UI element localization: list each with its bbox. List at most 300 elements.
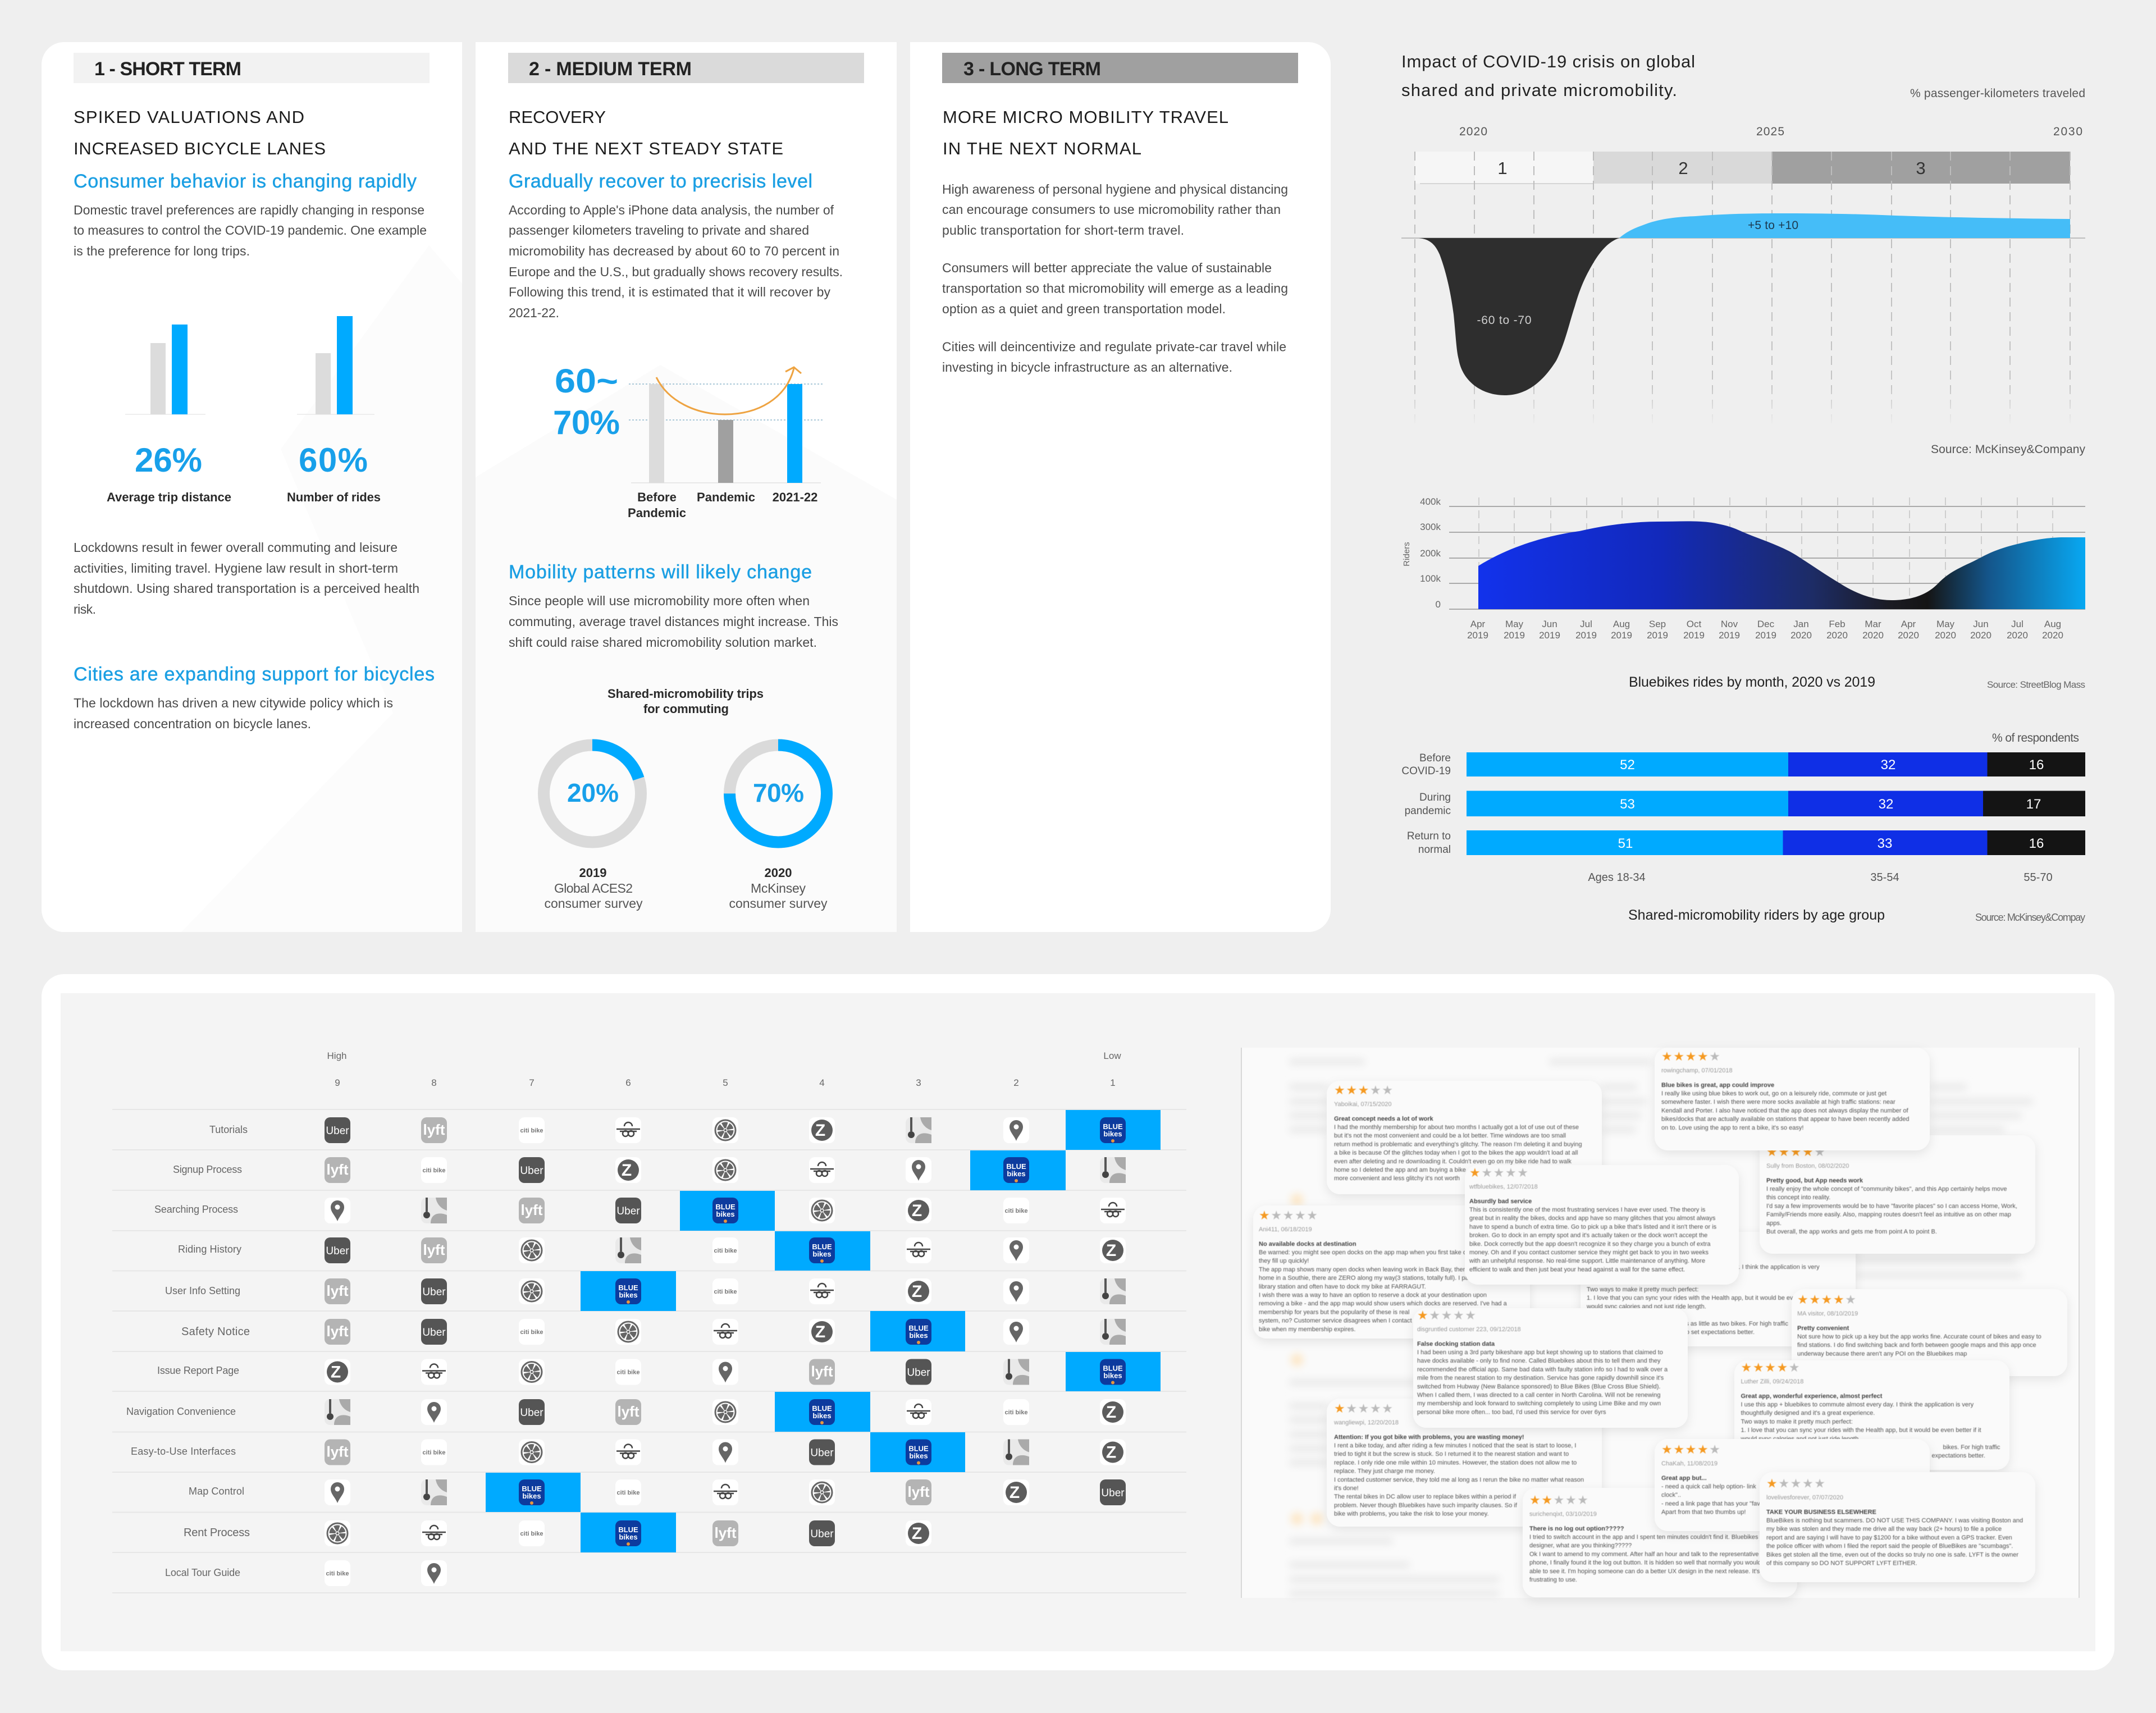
review card: lovelivesforever xyxy=(1760,1472,2035,1582)
icon: citi bike: citi bike xyxy=(617,1490,640,1496)
review card: disgruntled customer: my membership and look forward to switching completely to using Lime Bike and my own xyxy=(1417,1400,1661,1407)
review card: Ani411: ★★★★★ xyxy=(1259,1209,1319,1223)
bar: during pandemic: 53 xyxy=(1620,797,1635,812)
icon: citi bike: citi bike xyxy=(423,1167,445,1174)
row labels: pandemic xyxy=(1405,805,1451,817)
icon: map xyxy=(1100,1278,1126,1304)
month labels: Apr xyxy=(1901,619,1916,629)
review card: MA visitor: Pretty convenient xyxy=(1797,1325,1849,1332)
icon: blue bikes xyxy=(615,1278,641,1304)
text: apple data: Following this trend, it is estimated that it will recover by xyxy=(509,285,831,299)
review card: Ani411: removing a bike - and the app map would show users which docks are reserved. I've had a xyxy=(1259,1300,1508,1307)
month labels: 2020 xyxy=(1970,630,1991,641)
month labels: May xyxy=(1505,619,1524,629)
month labels: 2019 xyxy=(1504,630,1525,641)
review card: disgruntled customer: I had been using a 3rd party bikeshare app but kept showing up to stations that claimed to xyxy=(1417,1349,1663,1356)
icon: uber: Uber xyxy=(520,1165,543,1177)
scale header: Low xyxy=(1103,1050,1121,1061)
review card: rowingchamp: Kendall and Porter. I also have noticed that the app does not always display the number of xyxy=(1661,1107,1909,1114)
review card: Sully from Boston: this concept into reality. xyxy=(1766,1194,1830,1201)
text: lockdowns: Lockdowns result in fewer overall commuting and leisure xyxy=(74,540,398,555)
review card: Yaboikai: more convenient and less glitchy it's not worth xyxy=(1334,1175,1460,1182)
text: micromobility commuting: Since people will use micromobility more often when xyxy=(509,593,810,608)
stat: 60 percent: 60% xyxy=(299,441,368,479)
review card: MA visitor: find stations. I do find switching back and forth between google maps and this app once xyxy=(1797,1342,2036,1349)
heading: spiked valuations xyxy=(74,107,326,158)
header: long term xyxy=(942,53,1298,83)
icon: uber xyxy=(519,1157,545,1183)
icon: blue bikes xyxy=(906,1319,931,1345)
text: apple data: passenger kilometers traveling to private and shared xyxy=(509,223,809,237)
icon: citi bike: citi bike xyxy=(617,1369,640,1376)
chart labels: Before xyxy=(637,490,677,504)
row: Easy-to-Use Interfaces: Easy-to-Use Interfaces xyxy=(131,1446,236,1457)
chart: impact of covid-19 xyxy=(1401,52,2085,456)
phase bands: 2 xyxy=(1678,158,1688,178)
review card: disgruntled customer: ★★★★★ xyxy=(1417,1309,1477,1323)
icon: lyft xyxy=(906,1479,931,1505)
icon: pin xyxy=(1003,1117,1029,1143)
icon: citi bike: citi bike xyxy=(1005,1409,1027,1416)
chart: riders by age group xyxy=(1401,732,2085,923)
age group labels: 55-70 xyxy=(2023,871,2053,884)
stat: 60 to 70 percent: 70% xyxy=(553,404,620,441)
review card: Yaboikai: Great concept needs a lot of work xyxy=(1334,1116,1434,1122)
review card: lovelivesforever: my bike was stolen and they made me drive all the way back (2+ hours) to file a police xyxy=(1766,1526,2002,1533)
review card: wtfbluebikes: efficient to walk and then just beat your head against a wall for the same effect. xyxy=(1469,1266,1685,1273)
icon: uber: Uber xyxy=(810,1528,834,1540)
review card: Ani411: No available docks at destination xyxy=(1259,1241,1356,1248)
icon: citi bike xyxy=(1003,1198,1029,1223)
value: decline: -60 to -70 xyxy=(1477,314,1532,327)
heading: recovery: AND THE NEXT STEADY STATE xyxy=(509,139,783,158)
text: hygiene xyxy=(942,182,1288,237)
subheading: consumer behavior: Consumer behavior is changing rapidly xyxy=(74,171,417,192)
bar: return to normal: 33 xyxy=(1878,836,1892,851)
month labels: Aug xyxy=(1613,619,1630,629)
text: micromobility commuting: shift could raise shared micromobility solution market. xyxy=(509,635,817,650)
review card: lovelivesforever: of this company so DO NOT SUPPORT LYFT EITHER. xyxy=(1766,1560,1917,1566)
phase bands: 1 xyxy=(1497,158,1508,178)
row labels: Before xyxy=(1419,752,1451,764)
text: domestic travel xyxy=(74,203,427,258)
bar: during pandemic: 32 xyxy=(1879,797,1893,812)
row: Safety Notice: Safety Notice xyxy=(181,1326,250,1338)
icon: pin xyxy=(1003,1278,1029,1304)
icon: uber: Uber xyxy=(520,1407,543,1419)
y axis labels: 100k xyxy=(1420,573,1441,584)
source: Source: McKinsey&Compay xyxy=(1975,912,2085,923)
header: medium term xyxy=(508,53,864,83)
chart title: Shared-micromobility riders by age group xyxy=(1628,907,1885,923)
month labels: Jan xyxy=(1793,619,1809,629)
text: domestic travel: Domestic travel preferences are rapidly changing in response xyxy=(74,203,424,217)
review card: wangliewpi xyxy=(1327,1399,1602,1527)
icon: lyft: lyft xyxy=(618,1403,640,1420)
review card: lovelivesforever: BlueBikes is nothing but scammers. DO NOT USE THIS COMPANY. I was visiting Boston and xyxy=(1766,1517,2023,1524)
review card: wangliewpi: wangliewpi, 12/20/2018 xyxy=(1333,1419,1399,1426)
icon: lyft xyxy=(712,1520,738,1546)
text: apple data xyxy=(509,203,843,320)
month labels: 2020 xyxy=(1790,630,1812,641)
icon: z xyxy=(906,1278,931,1304)
review card: disgruntled customer: recommended the official app. Same bad data with faulty station info so I had to walk over a xyxy=(1417,1366,1668,1373)
donut: 2019: 2019 xyxy=(579,866,606,880)
review card: wtfbluebikes: Absurdly bad service xyxy=(1469,1198,1532,1205)
row: User Info Setting xyxy=(165,1271,1126,1311)
month labels xyxy=(1467,619,2063,641)
review card: lovelivesforever: lovelivesforever, 07/07/2020 xyxy=(1766,1495,1843,1501)
icon: citi bike xyxy=(712,1278,738,1304)
month labels: Jun xyxy=(1542,619,1557,629)
age group labels xyxy=(1588,871,2053,884)
text: lockdowns: risk. xyxy=(74,602,96,616)
source: Source: McKinsey&Company xyxy=(1931,443,2085,456)
icon: uber xyxy=(615,1198,641,1223)
icon: lyft xyxy=(615,1399,641,1425)
icon: z: Z xyxy=(912,1282,922,1301)
review card: Sully from Boston xyxy=(1760,1135,2035,1254)
header: medium term: 2 - MEDIUM TERM xyxy=(529,58,692,80)
icon: lyft: lyft xyxy=(327,1161,349,1178)
row: Signup Process xyxy=(173,1150,1126,1190)
review card: Luther Zilli behind: stations this might be a better color to set expectations better. xyxy=(1587,1329,1755,1336)
review card: surichenqixt: surichenqixt, 03/10/2019 xyxy=(1529,1511,1597,1518)
row labels: Return to xyxy=(1407,830,1451,842)
review card: wangliewpi: The rental bikes in DC allow user to replace bikes within a period if xyxy=(1334,1493,1516,1500)
heading: micro mobility: MORE MICRO MOBILITY TRAVEL xyxy=(943,107,1228,127)
icon: uber xyxy=(421,1319,447,1345)
icon: uber: Uber xyxy=(616,1205,640,1217)
icon: lyft xyxy=(519,1198,545,1223)
review card: wangliewpi: I rent a bike today, and after riding a few minutes I noticed that the seat is start to loose, I xyxy=(1334,1442,1576,1449)
bar: return to normal: 51 xyxy=(1618,836,1633,851)
phase bands: 3 xyxy=(1916,158,1926,178)
chart labels: Pandemic xyxy=(628,506,686,520)
donut: 2020: consumer survey xyxy=(729,896,828,911)
review card: Ani411: they fill up quickly! xyxy=(1259,1258,1309,1264)
stat: 60 percent: Number of rides xyxy=(287,490,381,504)
icon: uber xyxy=(906,1359,931,1385)
scale header: 2 xyxy=(1013,1077,1019,1088)
review card: Ani411: bike when my membership expires. xyxy=(1259,1326,1355,1333)
icon: pin xyxy=(421,1399,447,1425)
review card: Luther Zilli: 1. I love that you can sync your rides with the Health app, but it would be even better if it xyxy=(1741,1427,1981,1434)
month labels: 2020 xyxy=(1862,630,1884,641)
stat: 26 percent: 26% xyxy=(135,441,202,479)
chart title: shared and private micromobility. xyxy=(1401,80,1677,100)
review card: wtfbluebikes: wtfbluebikes, 12/07/2018 xyxy=(1469,1184,1538,1190)
review card: ChaKah: - need a quick call help option- link xyxy=(1661,1483,1756,1490)
chart labels: 2021-22 xyxy=(773,490,817,504)
review card: Ani411: membership for years but the popularity of these is real xyxy=(1259,1309,1409,1315)
subheading: mobility patterns: Mobility patterns will likely change xyxy=(509,561,812,583)
review card: Sully from Boston: apps. xyxy=(1766,1220,1782,1227)
review card: MA visitor: ★★★★★ xyxy=(1797,1293,1857,1307)
row: Rent Process: Rent Process xyxy=(184,1527,250,1539)
icon: blue bikes: bikes xyxy=(1103,1371,1122,1380)
donut: 2019: consumer survey xyxy=(545,896,643,911)
icon: blue bikes xyxy=(1100,1117,1126,1143)
text: apple data: micromobility has decreased by about 60 to 70 percent in xyxy=(509,244,839,258)
icon: lyft xyxy=(325,1319,350,1345)
review card: rowingchamp: somewhere faster. I wish there were more socks available at high traffic stations: near xyxy=(1661,1099,1895,1106)
review card: Sully from Boston: ★★★★★ xyxy=(1766,1145,1826,1159)
heading: spiked valuations: SPIKED VALUATIONS AND xyxy=(74,107,304,127)
icon: blue bikes: bikes xyxy=(522,1492,541,1500)
source: Source: StreetBlog Mass xyxy=(1987,679,2085,690)
review card: Yaboikai: I had the monthly membership for about two months I actually got a lot of use out of these xyxy=(1334,1124,1579,1131)
year axis: 2025 xyxy=(1756,125,1784,138)
month labels: Aug xyxy=(2044,619,2061,629)
stat: 26 percent: Average trip distance xyxy=(107,490,231,504)
review card: surichenqixt: I tried to switch account in the app and I spent ten minutes couldn't find it. Bluebikes xyxy=(1529,1534,1758,1541)
review card: Yaboikai: but it's not the most convenient and could be a lot better. Time windows are too small xyxy=(1334,1132,1566,1139)
icon: z: Z xyxy=(815,1323,825,1341)
text: apple data: 2021-22. xyxy=(509,305,559,320)
scale header: 6 xyxy=(625,1077,631,1088)
row labels xyxy=(1401,752,1451,856)
review card: Luther Zilli: ★★★★★ xyxy=(1741,1361,1801,1375)
row: Issue Report Page xyxy=(157,1352,1161,1391)
icon: lyft xyxy=(325,1278,350,1304)
icon: citi bike xyxy=(519,1117,545,1143)
review card: wangliewpi: problem. Never though Bluebikes have such imparity clauses. So if xyxy=(1334,1502,1518,1509)
review card: wangliewpi: ★★★★★ xyxy=(1334,1402,1394,1416)
text: lockdowns: shutdown. Using shared transportation is a perceived health xyxy=(74,581,419,596)
review card: wangliewpi: replace. They just charge me money. xyxy=(1334,1468,1435,1475)
icon: blue bikes xyxy=(809,1399,835,1425)
icon: z xyxy=(615,1157,641,1183)
heading: recovery xyxy=(509,107,783,158)
review card: lovelivesforever: Bikes get stolen all the time, even out of the docks so truly no one is safe. LYFT is the owner xyxy=(1766,1551,2018,1558)
row: Riding History xyxy=(178,1231,1126,1271)
review card: disgruntled customer: switched from Hubway (New Balance sponsored) to Blue Bikes (Blue Cross Blue Shield). xyxy=(1417,1383,1660,1390)
row: Local Tour Guide: Local Tour Guide xyxy=(165,1567,240,1578)
review card: lovelivesforever: report and are saying I will have to pay $1200 for a bike without even a GPS tracker. Even xyxy=(1766,1534,2012,1541)
month labels: 2019 xyxy=(1719,630,1740,641)
age group labels: Ages 18-34 xyxy=(1588,871,1646,884)
text: cities: investing in bicycle infrastructure as an alternative. xyxy=(942,360,1232,374)
review card: Ani411: Be warned: you might see open docks on the app map when you first take out a bike xyxy=(1259,1249,1490,1256)
month labels: Jul xyxy=(1580,619,1592,629)
chart title: shared micromobility trips: Shared-micromobility trips xyxy=(607,687,764,701)
review card: Yaboikai: return method is problematic and everything's glitchy. The reason I'm deleting it and buying xyxy=(1334,1141,1582,1148)
icon: blue bikes xyxy=(1003,1157,1029,1183)
icon: wings xyxy=(809,1278,835,1304)
review card: Luther Zilli behind: I use this app + bluebikes to commute almost every day. I think the application is very xyxy=(1587,1264,1820,1271)
subheading: gradually recover: Gradually recover to precrisis level xyxy=(509,171,812,192)
text: apple data: According to Apple's iPhone data analysis, the number of xyxy=(509,203,834,217)
review card: Luther Zilli behind xyxy=(1581,1232,1856,1346)
review card: Luther Zilli behind: would sync calories and not just ride length. xyxy=(1586,1303,1706,1310)
icon: blue bikes xyxy=(906,1440,931,1465)
review card: disgruntled customer: personal bike more often... too bad, I'd used this service for over 6yrs xyxy=(1417,1409,1606,1415)
icon: wheel xyxy=(519,1440,545,1465)
icon: map xyxy=(421,1479,447,1505)
review card: Luther Zilli behind: 2. Bikes show up as red when there's as little as two bikes. For high traffic xyxy=(1587,1321,1788,1327)
review card: wangliewpi: tried to tight it but the screw is stuck. So I returned it to the nearest station and want to xyxy=(1334,1451,1569,1458)
review card: rowingchamp xyxy=(1655,1048,1930,1150)
row: Issue Report Page: Issue Report Page xyxy=(157,1365,239,1376)
review card: Yaboikai: Yaboikai, 07/15/2020 xyxy=(1334,1101,1392,1108)
stat: 60 to 70 percent xyxy=(553,362,620,441)
review card: Luther Zilli: Great app, wonderful experience, almost perfect xyxy=(1741,1393,1883,1400)
icon: citi bike: citi bike xyxy=(714,1248,737,1254)
icon: citi bike xyxy=(615,1479,641,1505)
review card: wangliewpi: replace. I only ride one mile within 10 minutes. However, the station does not allow me to xyxy=(1334,1459,1577,1466)
icon: citi bike: citi bike xyxy=(326,1570,349,1577)
row: Rent Process xyxy=(184,1513,931,1552)
icon: lyft: lyft xyxy=(327,1443,349,1460)
heading: recovery: RECOVERY xyxy=(509,107,606,127)
scale header: 8 xyxy=(431,1077,437,1088)
month labels: 2020 xyxy=(2007,630,2028,641)
review card: rowingchamp: I really like using blue bikes to work out, go on a leisurely ride, commute or just get xyxy=(1661,1090,1886,1097)
icon: wheel xyxy=(519,1278,545,1304)
icon: uber xyxy=(325,1117,350,1143)
scale header: 5 xyxy=(723,1077,728,1088)
icon: wheel xyxy=(325,1520,350,1546)
review card: disgruntled customer: have docks available - only to find none. Called Bluebikes about this to tell them and they xyxy=(1417,1358,1661,1364)
month labels: May xyxy=(1936,619,1955,629)
year axis: 2030 xyxy=(2053,125,2082,138)
month labels: Mar xyxy=(1865,619,1881,629)
review card: disgruntled customer: mile from the nearest station to my destination. Service has gone rapidly downhill since it's xyxy=(1417,1375,1664,1382)
icon: blue bikes: BLUE xyxy=(618,1525,638,1534)
icon: pin xyxy=(325,1198,350,1223)
review card: Ani411: library station and often have to dock my bike at FARRAGUT. xyxy=(1259,1283,1426,1290)
review card: ChaKah: clock".. xyxy=(1661,1492,1681,1499)
month labels: 2019 xyxy=(1755,630,1776,641)
icon: blue bikes xyxy=(712,1198,738,1223)
row: Tutorials: Tutorials xyxy=(209,1124,248,1135)
icon: uber: Uber xyxy=(326,1125,349,1137)
month labels: Nov xyxy=(1721,619,1738,629)
review card: Luther Zilli xyxy=(1734,1360,2009,1470)
header: long term: 3 - LONG TERM xyxy=(963,58,1101,80)
review card: disgruntled customer: When I called them, I was directed to a call center in North Carolina. Will not be renewing xyxy=(1417,1392,1660,1399)
row labels: COVID-19 xyxy=(1401,765,1451,777)
review card: Yaboikai: even after deleting and re downloading it. Couldn't even go on my bike ride had to walk xyxy=(1334,1158,1572,1165)
icon: z xyxy=(809,1319,835,1345)
icon: wings xyxy=(615,1117,641,1143)
icon: uber xyxy=(519,1399,545,1425)
review card: rowingchamp: Blue bikes is great, app could improve xyxy=(1661,1082,1774,1089)
review card: Sully from Boston: Pretty good, but App needs work xyxy=(1766,1177,1863,1184)
review card: Luther Zilli: thoughtfully designed and it's a great experience. xyxy=(1741,1410,1875,1417)
icon: lyft: lyft xyxy=(423,1121,445,1138)
chart title: shared micromobility trips xyxy=(607,687,764,716)
review card: ChaKah: ChaKah, 11/08/2019 xyxy=(1661,1460,1718,1467)
icon: blue bikes: BLUE xyxy=(908,1324,929,1332)
review card: Luther Zilli: I use this app + bluebikes to commute almost every day. I think the application is very xyxy=(1741,1401,1974,1408)
review card: wangliewpi: Attention: If you got bike with problems, you are wasting money! xyxy=(1334,1434,1524,1441)
icon: wheel xyxy=(712,1399,738,1425)
bar: return to normal: 16 xyxy=(2029,836,2044,851)
icon: wheel xyxy=(519,1237,545,1263)
review card: disgruntled customer: disgruntled customer 223, 09/12/2018 xyxy=(1417,1326,1521,1333)
text: hygiene: public transportation for short-term travel. xyxy=(942,223,1184,237)
review card: wangliewpi: it's done! xyxy=(1334,1485,1359,1492)
icon: citi bike: citi bike xyxy=(423,1450,445,1456)
icon: uber: Uber xyxy=(422,1286,446,1298)
row: Local Tour Guide xyxy=(165,1560,447,1586)
icon: wings xyxy=(421,1520,447,1546)
row: Tutorials xyxy=(209,1110,1161,1150)
stat: 60 percent xyxy=(287,441,381,504)
review card: lovelivesforever: the police officer with whom I filed the report said the people of BlueBikes are "scumbags". xyxy=(1766,1543,2013,1550)
icon: wheel xyxy=(712,1117,738,1143)
icon: citi bike xyxy=(421,1440,447,1465)
text: hygiene: High awareness of personal hygiene and physical distancing xyxy=(942,182,1288,197)
scale header: 9 xyxy=(335,1077,340,1088)
month labels: Dec xyxy=(1757,619,1775,629)
text: lockdowns: activities, limiting travel. Hygiene law result in short-term xyxy=(74,561,398,575)
icon: blue bikes: bikes xyxy=(909,1452,928,1460)
icon: uber: Uber xyxy=(326,1245,349,1257)
text: lockdowns xyxy=(74,540,419,616)
table: usability ranking by feature xyxy=(112,1050,1186,1593)
scale header: 4 xyxy=(819,1077,825,1088)
review card: Luther Zilli: Two ways to make it pretty much perfect: xyxy=(1741,1418,1853,1425)
icon: uber xyxy=(809,1440,835,1465)
area: decline xyxy=(1419,238,1619,395)
icon: blue bikes: bikes xyxy=(619,1291,638,1299)
row labels: normal xyxy=(1418,844,1451,856)
panel: app store reviews xyxy=(1241,1048,2080,1598)
review card: Luther Zilli: expectations better. xyxy=(1931,1452,1985,1459)
chart labels xyxy=(628,490,817,520)
month labels: Feb xyxy=(1829,619,1846,629)
review card: Sully from Boston: I'd say a few improvements would be to have "favorite places" so I can access Home, Work, xyxy=(1766,1203,2017,1209)
icon: wheel xyxy=(615,1319,641,1345)
icon: blue bikes xyxy=(1100,1359,1126,1385)
icon: blue bikes: BLUE xyxy=(715,1203,736,1211)
text: micromobility commuting xyxy=(509,593,838,650)
icon: z xyxy=(325,1359,350,1385)
icon: map xyxy=(325,1399,350,1425)
scale header: High xyxy=(327,1050,346,1061)
review card: Ani411: home in a Southie, there are ZERO along my way(3 stations, totally full). I pass the xyxy=(1259,1275,1485,1282)
text: consumers: transportation so that micromobility will emerge as a leading xyxy=(942,281,1288,295)
review card: lovelivesforever: TAKE YOUR BUSINESS ELSEWHERE xyxy=(1766,1509,1876,1516)
icon: z: Z xyxy=(1010,1483,1020,1502)
chart title: Bluebikes rides by month, 2020 vs 2019 xyxy=(1629,674,1875,690)
icon: citi bike xyxy=(615,1359,641,1385)
review card: wtfbluebikes: bike. Dock correctly but the app doesn't recognize it so they charge you a bunch of extra xyxy=(1469,1241,1711,1248)
icon: uber xyxy=(809,1520,835,1546)
review card: lovelivesforever: ★★★★★ xyxy=(1766,1477,1826,1491)
icon: z: Z xyxy=(912,1524,922,1543)
icon: blue bikes: bikes xyxy=(619,1533,638,1541)
donut: 2020: 2020 xyxy=(765,866,792,880)
icon: blue bikes xyxy=(615,1520,641,1546)
icon: z: Z xyxy=(1106,1443,1116,1462)
heading: micro mobility: IN THE NEXT NORMAL xyxy=(943,139,1141,158)
bar: before covid-19: 52 xyxy=(1620,757,1635,773)
row labels: During xyxy=(1419,792,1451,803)
bar: before covid-19 xyxy=(1467,752,2085,776)
icon: lyft: lyft xyxy=(327,1282,349,1299)
icon: citi bike xyxy=(712,1237,738,1263)
icon: lyft: lyft xyxy=(907,1483,930,1500)
icon: lyft xyxy=(325,1157,350,1183)
text: domestic travel: to measures to control the COVID-19 pandemic. One example xyxy=(74,223,427,237)
bar chart: average trip distance xyxy=(125,325,205,415)
icon: wheel xyxy=(712,1157,738,1183)
review card: surichenqixt: able to see it. I'm hoping someone can do a better UX design in the next release. It's xyxy=(1529,1568,1760,1575)
